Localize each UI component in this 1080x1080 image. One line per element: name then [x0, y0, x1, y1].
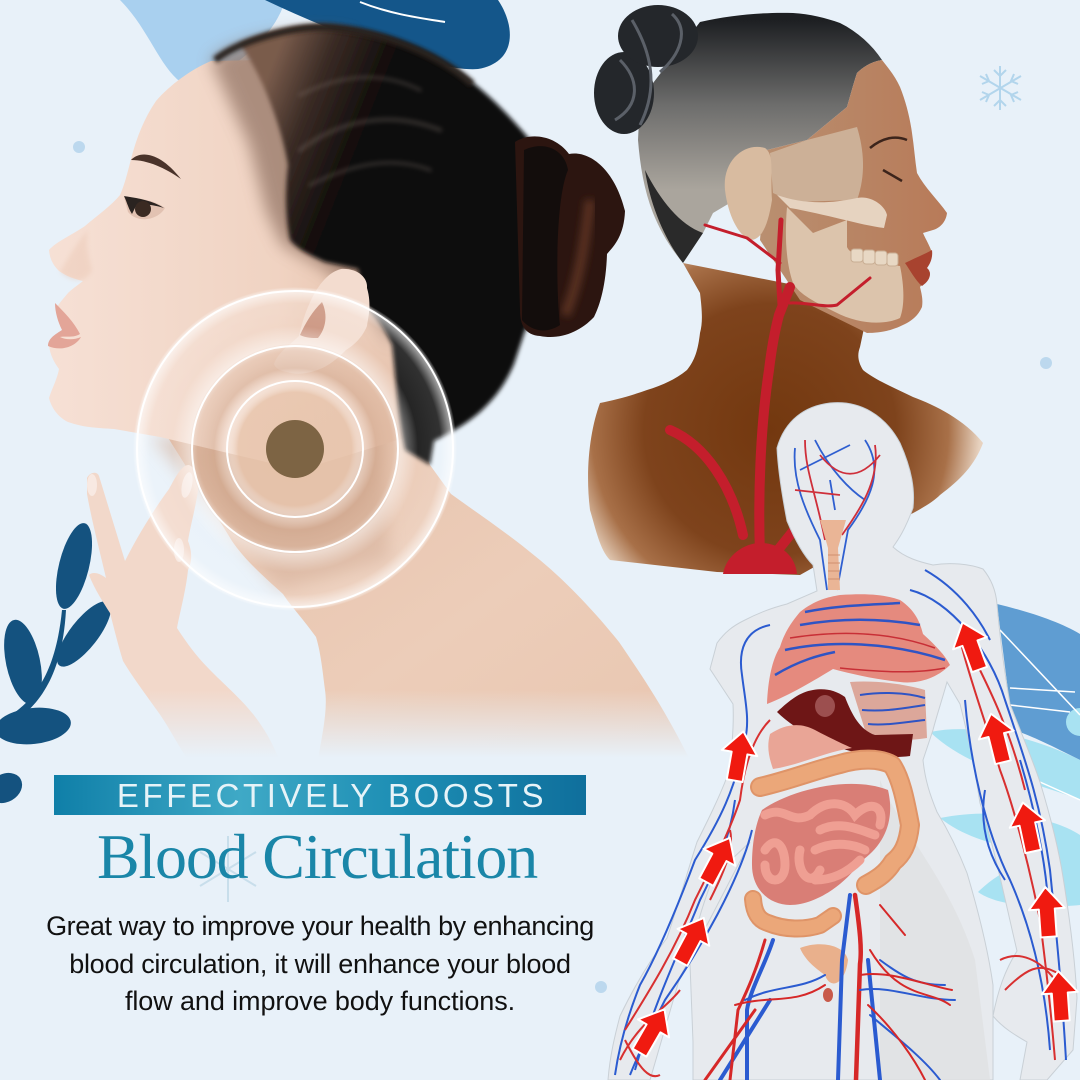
snowflake under heading	[200, 836, 256, 902]
body figure	[608, 403, 1080, 1080]
title: Blood Circulation	[97, 821, 537, 892]
body text	[46, 911, 594, 1016]
right leaf decoration	[930, 604, 1080, 907]
trachea	[820, 520, 846, 590]
finger nails	[87, 471, 195, 562]
eyebrow	[131, 154, 181, 179]
jaw bone	[786, 207, 903, 323]
hair	[240, 25, 545, 465]
stomach	[768, 725, 852, 769]
soft hairline	[211, 32, 400, 345]
nose shadow	[60, 230, 92, 280]
body text: Great way to improve your health by enhancing	[46, 911, 594, 941]
cheek bone	[777, 195, 887, 228]
small dots	[73, 141, 1052, 993]
ear	[725, 147, 772, 240]
chin shadow	[150, 420, 390, 590]
banner heading: EFFECTIVELY BOOSTS	[117, 777, 547, 814]
left leaf sprig	[0, 520, 120, 809]
face	[760, 60, 947, 333]
lips	[48, 303, 81, 348]
body text: flow and improve body functions.	[125, 986, 515, 1016]
neck and shoulders	[160, 380, 690, 760]
large intestine	[753, 760, 910, 929]
torso arteries and veins	[705, 895, 955, 1080]
eye and brow	[870, 138, 907, 181]
snowflake top right	[980, 66, 1021, 110]
diaphragm flap	[850, 681, 927, 740]
ear	[274, 269, 369, 374]
eye	[124, 196, 165, 219]
hair underside	[645, 170, 703, 263]
hair	[638, 13, 882, 263]
top decorative leaves	[120, 0, 510, 85]
carotid arteries	[670, 220, 870, 555]
neck and shoulders	[588, 263, 983, 575]
fade under woman	[150, 690, 720, 770]
arm and leg vessels	[615, 570, 1066, 1076]
lower torso shading	[880, 780, 990, 1080]
skull	[770, 127, 863, 202]
body text: blood circulation, it will enhance your blood	[69, 948, 571, 978]
pelvic organ	[800, 944, 848, 1002]
red arrows	[624, 616, 1080, 1062]
bun	[594, 5, 698, 134]
anatomical head	[588, 5, 983, 575]
liver	[777, 689, 913, 757]
head vessels	[795, 440, 880, 590]
lips	[905, 250, 932, 286]
brown patch	[266, 420, 324, 478]
lungs	[767, 594, 950, 704]
bun	[515, 136, 625, 337]
woman with patch	[48, 25, 720, 770]
body silhouette	[608, 403, 1077, 1080]
hand	[87, 465, 278, 757]
small intestine	[752, 784, 890, 905]
face	[49, 60, 430, 470]
teeth	[851, 249, 898, 266]
aortic arch	[723, 543, 797, 574]
patch and pulse rings	[133, 287, 457, 611]
hair gloss	[300, 77, 440, 185]
hair top rim	[215, 27, 472, 84]
